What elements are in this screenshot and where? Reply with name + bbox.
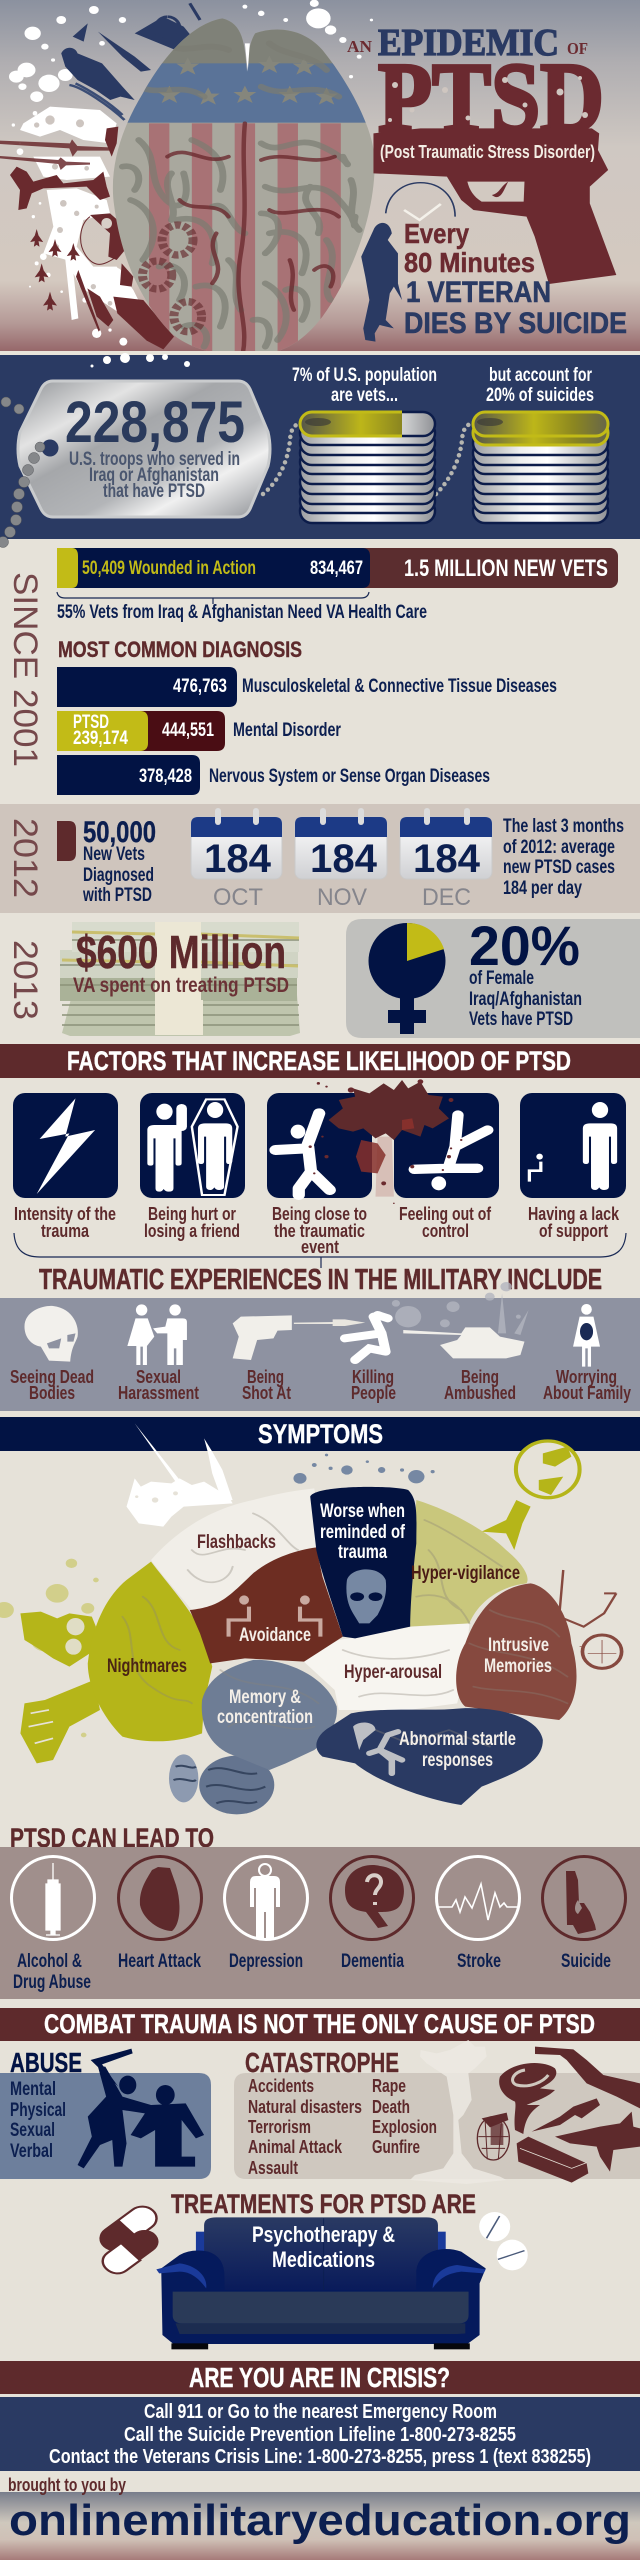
bar: nervous system (57, 755, 490, 795)
icon: handgun (373, 128, 616, 284)
icon: skull (346, 1569, 386, 1623)
panel: abuse: Physical (10, 2100, 66, 2121)
icon: pregnant woman (573, 1304, 600, 1367)
icon: capsules (95, 2202, 164, 2278)
captions: experiences: Seeing Dead (10, 1367, 94, 1387)
icon: abuse figures (78, 2049, 204, 2168)
icon: falling figure (345, 1315, 388, 1360)
captions: consequences: Stroke (457, 1951, 501, 1972)
heading: treatments: TREATMENTS FOR PTSD ARE (171, 2189, 476, 2219)
icon: person falling (276, 1113, 330, 1195)
panel: catastrophe: Gunfire (372, 2136, 420, 2157)
war silhouettes (0, 3, 200, 349)
captions: experiences: Shot At (242, 1383, 291, 1403)
region: hyper-arousal (302, 1623, 469, 1710)
bar: nervous system: 378,428 (139, 766, 192, 787)
calendar: December: 184 (413, 837, 481, 881)
panel: treatments illustration (95, 2202, 528, 2349)
text: 20% of suicides: but account for (489, 365, 592, 386)
dog tag stack: 7 percent (300, 412, 435, 523)
captions: experiences: Ambushed (444, 1383, 516, 1403)
calendar: October (191, 808, 282, 911)
panel: abuse: Verbal (10, 2141, 53, 2162)
panel: consequences (0, 1847, 640, 1999)
icon: chair and person alone (529, 1102, 617, 1190)
panel: catastrophe: Rape (372, 2075, 406, 2096)
panel: treatments illustration: Medications (272, 2247, 375, 2272)
icon: brain question (330, 1856, 414, 1940)
labels: symptoms: reminded of (320, 1522, 406, 1543)
panel: treatments illustration: Psychotherapy & (252, 2222, 395, 2247)
captions: consequences: Heart Attack (118, 1951, 201, 1972)
bar: musculoskeletal: 476,763 (173, 676, 227, 697)
icon: tablets (479, 2212, 528, 2270)
heading: most common diagnosis: MOST COMMON DIAGNOSIS (58, 637, 302, 662)
heading: PTSD can lead to: PTSD CAN LEAD TO (10, 1823, 214, 1853)
icon: two chairs (229, 1595, 320, 1637)
captions: experiences: People (351, 1383, 396, 1403)
bar: 1.5 million new vets: 50,409 Wounded in Action (82, 558, 256, 579)
panel: abuse: Sexual (10, 2120, 55, 2141)
captions: factors: control (422, 1221, 469, 1241)
calendar: October: OCT (213, 884, 263, 911)
footer: onlinemilitaryeducation.org (9, 2496, 631, 2545)
panel: crisis contacts: Call 911 or Go to the nearest Emergency Room (144, 2401, 497, 2423)
bar: 1.5 million new vets (57, 548, 618, 588)
labels: symptoms: Memory & (229, 1687, 301, 1708)
bar: mental disorder: 239,174 (73, 728, 128, 749)
panel: catastrophe: CATASTROPHE (245, 2047, 399, 2078)
icon: gun in hand (535, 2047, 640, 2108)
captions: consequences: Drug Abuse (13, 1972, 91, 1993)
captions: factors: of support (539, 1221, 608, 1241)
calendar: December: DEC (422, 884, 471, 911)
icon: pistol (233, 1315, 292, 1360)
labels: symptoms: Abnormal startle (399, 1729, 516, 1750)
text: every 80 minutes statistic (404, 218, 627, 340)
icons: catastrophe (410, 2040, 640, 2184)
captions: consequences: Alcohol & (17, 1951, 82, 1972)
title: An Epidemic of PTSD: AN (347, 37, 373, 56)
panel: catastrophe (234, 2040, 640, 2184)
region: worse when reminded (310, 1487, 416, 1638)
text: every 80 minutes statistic: 1 VETERAN (406, 276, 551, 309)
captions: experiences: Being (461, 1367, 499, 1387)
decor: ink splatter (293, 1454, 435, 1484)
region: flashbacks (151, 1488, 322, 1610)
icon: skull (24, 1306, 78, 1362)
bar: nervous system: Nervous System or Sense Organ Diseases (209, 766, 490, 787)
bead chains (0, 397, 490, 548)
calendar: November: NOV (317, 884, 367, 911)
icon: female symbol pie (368, 923, 446, 1034)
bar: mental disorder: PTSD (73, 712, 109, 733)
icon: soldier silhouette (361, 223, 402, 342)
bullet (294, 1319, 365, 1326)
stat: 50,000: with PTSD (82, 885, 152, 906)
captions: factors: losing a friend (144, 1221, 240, 1241)
hero panel (0, 0, 640, 360)
stat: 50,000: New Vets (83, 844, 145, 865)
bar chart: diagnosis (57, 667, 557, 795)
title: An Epidemic of PTSD: OF (567, 39, 588, 58)
icon: shark (555, 2112, 640, 2172)
icon: person and coffin (147, 1099, 238, 1195)
blood splatter (309, 1079, 462, 1204)
footer (0, 2475, 640, 2560)
calendar: October: 184 (204, 837, 272, 881)
text: 7% of population: are vets... (331, 385, 398, 406)
captions: consequences: Dementia (341, 1951, 404, 1972)
captions: experiences: Sexual (136, 1367, 181, 1387)
title: An Epidemic of PTSD: EPIDEMIC (378, 22, 559, 64)
timeline label: since 2001: SINCE 2001 (6, 572, 44, 767)
captions: factors: Being close to (272, 1204, 367, 1224)
dog tag stack: 20 percent (473, 412, 608, 523)
captions: experiences: Being (247, 1367, 284, 1387)
panel: catastrophe: Explosion (372, 2116, 437, 2137)
dog tag with 228,875: 228,875 (65, 390, 245, 455)
icon: couch (156, 2217, 486, 2349)
panel: factor icons (13, 1079, 626, 1204)
icon: money stacks (60, 922, 300, 1036)
decor: small brains (169, 1754, 274, 1814)
heading band: crisis (0, 2361, 640, 2394)
icon: clock (386, 183, 455, 220)
text: 7% of population (292, 365, 437, 406)
text: every 80 minutes statistic: Every (404, 218, 469, 249)
title: An Epidemic of PTSD (347, 22, 604, 153)
title: An Epidemic of PTSD: PTSD (378, 42, 604, 153)
panel: catastrophe: Death (372, 2096, 410, 2117)
region: avoidance (190, 1547, 343, 1663)
captions: experiences: Bodies (29, 1383, 75, 1403)
icon: heart (118, 1856, 202, 1940)
brain folds (122, 1513, 567, 1747)
stat: 50,000: 50,000 (83, 816, 156, 849)
icon: startled figure (369, 1732, 402, 1773)
heading band: symptoms: SYMPTOMS (258, 1419, 383, 1449)
captions: consequences: Depression (229, 1951, 303, 1972)
labels: symptoms: Flashbacks (197, 1532, 276, 1553)
icon: person upside down (414, 1115, 488, 1190)
brain diagram: symptoms (0, 1423, 622, 1814)
text: 20% of suicides (486, 365, 594, 406)
heading band: symptoms (0, 1417, 640, 1451)
bar: mental disorder: 444,551 (162, 720, 214, 741)
brace and caption: 55% Vets from Iraq & Afghanistan Need VA Health Care (57, 602, 427, 623)
icon: man with mark (224, 1856, 308, 1940)
panel: catastrophe: Animal Attack (248, 2136, 343, 2157)
heading band: crisis: ARE YOU ARE IN CRISIS? (189, 2362, 450, 2393)
panel: 20% female vets: Iraq/Afghanistan (469, 989, 582, 1010)
panel: crisis contacts: Call the Suicide Prevention Lifeline 1-800-273-8255 (124, 2424, 516, 2446)
footer: brought to you by (8, 2475, 126, 2495)
panel: 20% female vets: of Female (469, 968, 534, 989)
dog tag with 228,875: Iraq or Afghanistan (89, 465, 219, 486)
captions: factors: Intensity of the (14, 1204, 116, 1224)
icon: coffin (517, 2137, 588, 2183)
panel: catastrophe: Natural disasters (248, 2096, 362, 2117)
region: intrusive memories (456, 1583, 577, 1720)
captions: factors (14, 1204, 620, 1257)
icon: grenade (477, 2113, 509, 2160)
decor: gas mask and fist (0, 1559, 100, 1763)
icon: tank (403, 1327, 524, 1358)
text: last 3 months: 184 per day (503, 878, 582, 899)
labels: symptoms: trauma (338, 1542, 387, 1563)
stat: 50,000: Diagnosed (83, 865, 154, 886)
panel: catastrophe: Accidents (248, 2075, 314, 2096)
labels: symptoms: Hyper-arousal (344, 1662, 442, 1683)
labels: symptoms: Intrusive (488, 1635, 549, 1656)
timeline label: 2013: 2013 (6, 940, 44, 1020)
panel: 20% female vets (346, 914, 640, 1038)
panel: 20% female vets: Vets have PTSD (469, 1009, 573, 1030)
bar: musculoskeletal (57, 667, 557, 707)
captions: factors: Feeling out of (399, 1204, 492, 1224)
panel: vets statistics (0, 351, 640, 548)
labels: symptoms: Worse when (320, 1501, 405, 1522)
decor: syringe and scene (127, 1423, 233, 1527)
region: memory and concentration (202, 1660, 337, 1770)
icon: mushroom cloud (410, 2040, 507, 2184)
labels: symptoms: Hyper-vigilance (411, 1563, 520, 1584)
brace and caption (57, 592, 427, 623)
captions: factors: the traumatic (274, 1221, 365, 1241)
panel: traumatic experiences (0, 1282, 640, 1411)
calendar: December (400, 808, 492, 911)
dog tag with 228,875: U.S. troops who served in (69, 449, 240, 470)
labels: symptoms: Avoidance (239, 1625, 311, 1646)
icon: syringe (12, 1856, 94, 1940)
captions: factors: event (301, 1237, 339, 1257)
text: 20% of suicides: 20% of suicides (486, 385, 594, 406)
captions: factors: trauma (41, 1221, 90, 1241)
panel: money stack and $600 million: $600 Million (76, 926, 286, 978)
timeline label: 2012: 2012 (6, 818, 44, 898)
panel: catastrophe: Assault (248, 2157, 298, 2178)
region: nightmares (88, 1562, 212, 1741)
icon: ecg line (436, 1856, 520, 1940)
labels: symptoms: Nightmares (107, 1656, 187, 1677)
captions: experiences (10, 1367, 631, 1403)
captions: consequences (13, 1951, 611, 1993)
captions: experiences: Harassment (118, 1383, 199, 1403)
text: last 3 months (503, 816, 624, 899)
captions: factors: Being hurt or (148, 1204, 236, 1224)
panel: 20% female vets: 20% (469, 914, 580, 977)
decor: globe with atlas (482, 1441, 580, 1550)
text: every 80 minutes statistic: 80 Minutes (404, 247, 535, 278)
boot prints (142, 225, 202, 332)
decor: glasses and compass (559, 1570, 622, 1668)
bar: 1.5 million new vets: 834,467 (310, 558, 363, 579)
icon: pistol (542, 1856, 626, 1940)
captions: experiences: Worrying (556, 1367, 617, 1387)
panel: abuse: Mental (10, 2079, 56, 2100)
labels: symptoms: responses (422, 1750, 493, 1771)
region: abnormal startle (316, 1708, 543, 1805)
icon: lightning (37, 1098, 95, 1194)
bar: mental disorder: Mental Disorder (233, 720, 341, 741)
captions: consequences: Suicide (561, 1951, 611, 1972)
icon: woman and man (127, 1304, 187, 1365)
panel: money stack and $600 million: VA spent on treating PTSD (73, 974, 289, 997)
panel: money stack and $600 million (60, 922, 300, 1036)
labels: symptoms: concentration (217, 1707, 313, 1728)
captions: factors: Having a lack (528, 1204, 620, 1224)
splash (392, 1282, 529, 1335)
labels: symptoms: Memories (484, 1656, 552, 1677)
bar: mental disorder (57, 711, 341, 751)
icon: knife (532, 2098, 600, 2132)
region: hyper-vigilance (408, 1500, 528, 1627)
panel: abuse (0, 2047, 211, 2179)
icon: tornado (499, 2063, 556, 2134)
panel: catastrophe: Terrorism (248, 2116, 311, 2137)
calendar: November: 184 (310, 837, 378, 881)
labels: symptoms (107, 1501, 552, 1771)
dog tag with 228,875: that have PTSD (103, 481, 205, 502)
brain flag (113, 18, 374, 351)
panel: abuse: ABUSE (10, 2047, 82, 2078)
panel: crisis contacts (0, 2397, 640, 2471)
captions: experiences: Killing (352, 1367, 394, 1387)
panel: 2012 (0, 804, 640, 913)
splatter: white paint (9, 0, 373, 346)
dog tag with 228,875 (18, 381, 270, 517)
text: 7% of population: 7% of U.S. population (292, 365, 437, 386)
calendar: November (295, 808, 387, 911)
stat: 50,000 (57, 816, 156, 906)
